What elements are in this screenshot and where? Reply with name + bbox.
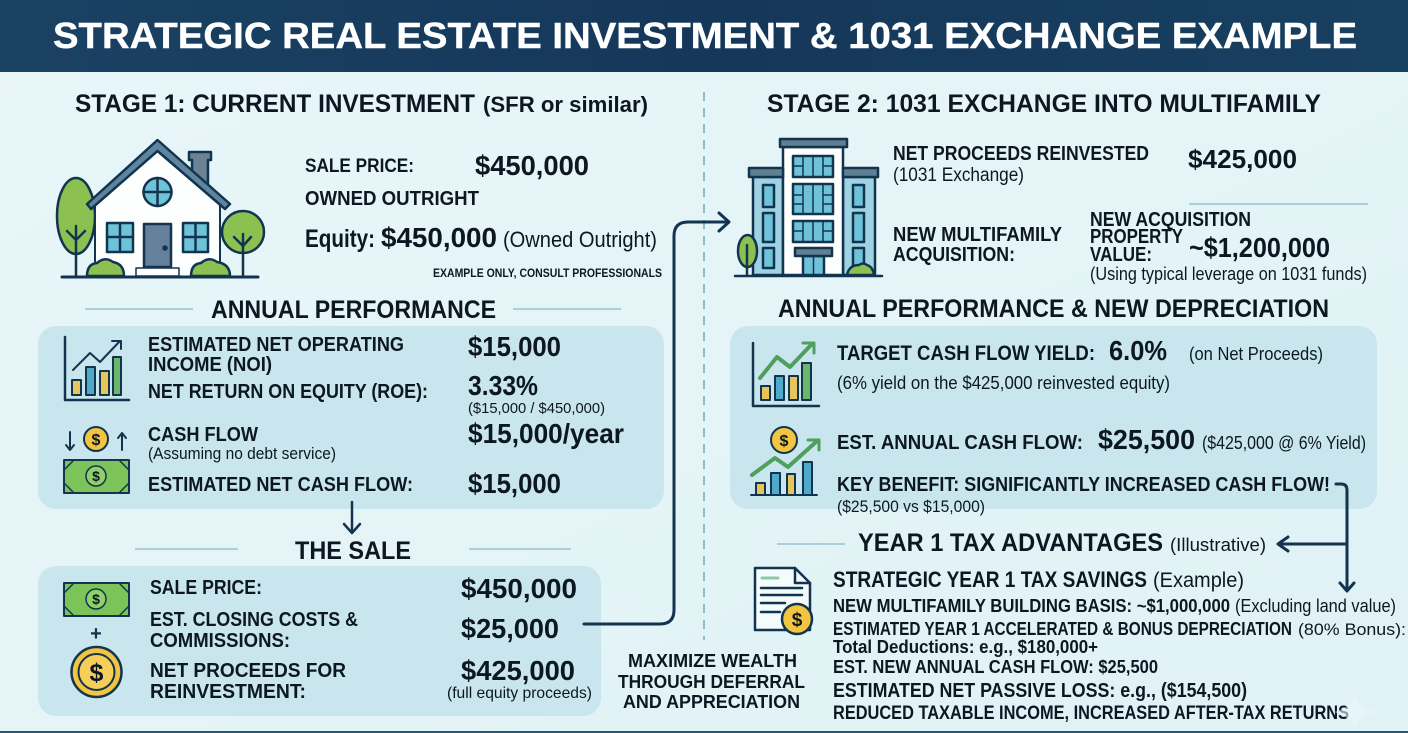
yield text: 6.0% [1109,335,1167,366]
heading: year 1 tax advantages: (Illustrative) [1170,535,1266,555]
icon: coin, arrows and banknote: $ [92,468,100,484]
cash flow text: $25,500 [1098,424,1195,455]
metric labels and values: $15,000/year [468,418,624,449]
current investment figures: Equity: [305,225,375,253]
icon: house with trees [57,140,264,277]
cash flow text: EST. ANNUAL CASH FLOW: [837,432,1083,454]
tax savings list: STRATEGIC YEAR 1 TAX SAVINGS [833,567,1147,592]
sale figures: REINVESTMENT: [150,681,306,703]
tax savings list: NEW MULTIFAMILY BUILDING BASIS: ~$1,000,000 [833,596,1230,616]
icon: banknote plus coin: + [90,623,102,645]
current investment figures [305,150,662,280]
metric labels and values: (Assuming no debt service) [148,444,336,463]
reinvestment and acquisition figures: NET PROCEEDS REINVESTED [893,143,1149,165]
reinvestment and acquisition figures: ~$1,200,000 [1189,232,1330,263]
callout: maximize wealth: AND APPRECIATION [623,692,800,712]
metric labels and values: ESTIMATED NET CASH FLOW: [148,474,413,496]
icon: coin, arrows and banknote: $ [92,432,101,449]
icon: coin, arrows and banknote [64,427,129,493]
icon: tax document with coin: $ [792,610,803,631]
reinvestment and acquisition figures [893,143,1368,284]
icon: yield chart [753,343,819,406]
tax savings list: (80% Bonus): [1298,620,1406,639]
icon: tax document with coin [755,568,812,634]
arrow: performance to sale [344,502,360,533]
callout: maximize wealth: THROUGH DEFERRAL [618,672,805,692]
title banner: STRATEGIC REAL ESTATE INVESTMENT & 1031 EXCHANGE EXAMPLE [53,15,1357,56]
tax savings list: (Example) [1153,569,1244,592]
sale figures: $425,000 [461,655,575,686]
icon: banknote plus coin [64,583,129,697]
icon: coin over rising bars: $ [780,433,789,450]
reinvestment and acquisition figures: NEW MULTIFAMILY [893,224,1063,246]
icon: banknote plus coin: $ [92,591,100,607]
panel: the sale [38,566,601,716]
heading: year 1 tax advantages: YEAR 1 TAX ADVANTAGES [858,529,1163,557]
heading: annual performance: ANNUAL PERFORMANCE [211,296,496,324]
callout: maximize wealth [618,651,805,712]
yield text: (on Net Proceeds) [1189,344,1323,364]
panel: annual performance [38,326,664,509]
reinvestment and acquisition figures: (Using typical leverage on 1031 funds) [1090,264,1367,284]
metric labels and values: $15,000 [468,468,561,499]
arrow: sale proceeds to stage 2 [584,213,729,624]
tax savings list: EST. NEW ANNUAL CASH FLOW: $25,500 [833,657,1158,677]
heading: stage 1: STAGE 1: CURRENT INVESTMENT [75,90,475,118]
metric labels and values: INCOME (NOI) [148,354,272,376]
sale figures: $450,000 [461,573,577,604]
metric labels and values: NET RETURN ON EQUITY (ROE): [148,381,428,403]
sale figures [150,573,592,703]
metric labels and values: ESTIMATED NET OPERATING [148,334,404,356]
icon: banknote plus coin: $ [90,659,104,687]
yield text: TARGET CASH FLOW YIELD: [837,342,1095,365]
metric labels and values [148,331,624,499]
tax savings list: Total Deductions: e.g., $180,000+ [833,637,1098,657]
current investment figures: SALE PRICE: [305,156,414,177]
metric labels and values: 3.33% [468,370,538,401]
icon: multifamily building [735,139,882,276]
sparkle mark [1334,692,1376,732]
yield text: (6% yield on the $425,000 reinvested equity) [837,373,1170,393]
reinvestment and acquisition figures: VALUE: [1090,244,1152,266]
tax savings list: ESTIMATED YEAR 1 ACCELERATED & BONUS DEPRECIATION [833,619,1292,639]
metric labels and values: CASH FLOW [148,424,258,446]
heading: the sale: THE SALE [295,537,411,565]
tax savings list [833,567,1406,724]
reinvestment and acquisition figures: (1031 Exchange) [893,165,1024,186]
tax savings list: (Excluding land value) [1235,596,1396,616]
heading: annual performance and depreciation: ANNUAL PERFORMANCE & NEW DEPRECIATION [778,295,1329,323]
cash flow text [837,424,1366,516]
bottom border [0,731,1408,733]
reinvestment and acquisition figures: $425,000 [1188,144,1297,174]
heading: stage 1: (SFR or similar) [483,92,648,117]
callout: maximize wealth: MAXIMIZE WEALTH [628,651,797,671]
title banner [0,0,1408,72]
cash flow text: ($425,000 @ 6% Yield) [1202,433,1366,453]
current investment figures: $450,000 [475,150,589,181]
yield text [837,335,1323,393]
icon: coin over rising bars [751,427,819,495]
icon: growth chart [65,337,129,400]
sale figures: $25,000 [461,613,559,644]
reinvestment and acquisition figures: NEW ACQUISITION [1090,209,1251,231]
cash flow text: KEY BENEFIT: SIGNIFICANTLY INCREASED CASH FLOW! [837,474,1330,496]
sale figures: EST. CLOSING COSTS & [150,609,358,631]
reinvestment and acquisition figures: PROPERTY [1090,226,1184,248]
current investment figures: OWNED OUTRIGHT [305,188,479,210]
cash flow text: ($25,500 vs $15,000) [837,497,985,516]
current investment figures: (Owned Outright) [503,227,657,252]
sale figures: NET PROCEEDS FOR [150,660,347,682]
sale figures: SALE PRICE: [150,577,262,599]
reinvestment and acquisition figures: ACQUISITION: [893,244,1015,266]
tax savings list: ESTIMATED NET PASSIVE LOSS: e.g., ($154,500) [833,680,1247,702]
panel: new annual performance [730,326,1377,516]
centre dashed divider [703,92,705,640]
metric labels and values: $15,000 [468,331,561,362]
arrow: key benefit to tax advantages [1278,484,1354,591]
sale figures: COMMISSIONS: [150,630,290,652]
heading: stage 2: STAGE 2: 1031 EXCHANGE INTO MULTIFAMILY [767,90,1321,118]
metric labels and values: ($15,000 / $450,000) [468,400,605,417]
heading: year 1 tax advantages [777,529,1266,557]
current investment figures: $450,000 [381,222,497,253]
sale figures: (full equity proceeds) [447,685,592,702]
current investment figures: EXAMPLE ONLY, CONSULT PROFESSIONALS [433,266,662,280]
